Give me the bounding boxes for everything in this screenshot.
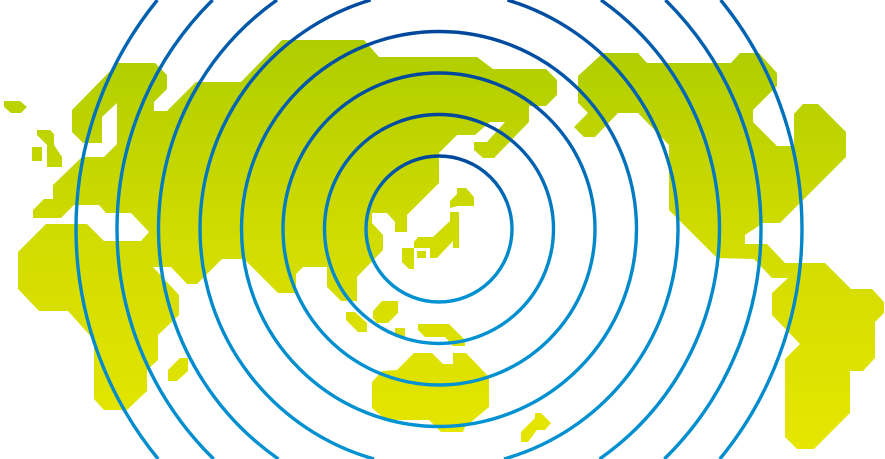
Ireland [32,147,42,161]
Sulawesi [395,328,405,337]
Iceland [4,101,27,113]
Sumatra [346,312,367,332]
New Guinea [418,324,465,346]
Australia [372,353,489,432]
Great Britain [37,130,62,167]
Madagascar [168,358,188,381]
Hokkaido [450,188,474,208]
Honshu [414,212,459,258]
New Zealand [521,413,551,442]
Americas [574,53,884,449]
Borneo [373,301,398,323]
Eurasia and Africa [18,40,557,410]
Shikoku [417,251,426,258]
Kyushu [402,248,414,269]
